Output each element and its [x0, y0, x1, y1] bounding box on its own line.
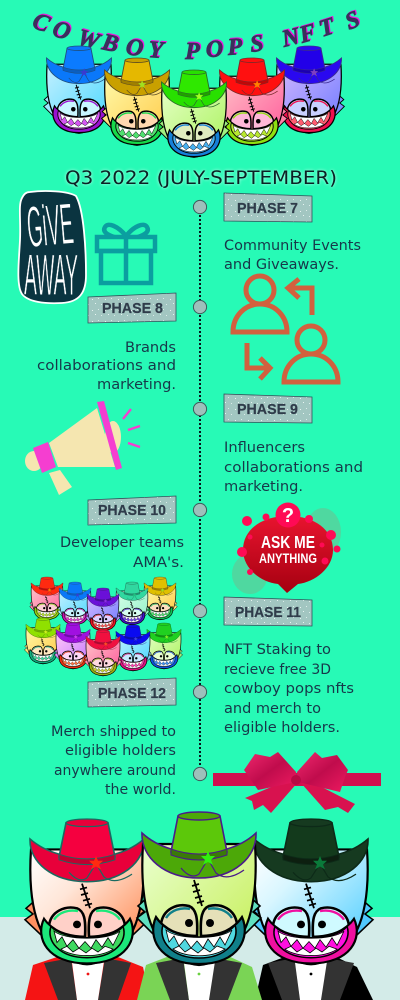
text: AWAY: [24, 243, 78, 308]
icon: ribbon bow: [213, 752, 381, 813]
subtitle: Q3 2022 (JULY-SEPTEMBER): [65, 167, 337, 189]
character: dark green hat large: [249, 819, 373, 964]
icon: ask me anything bubble: ?: [282, 505, 294, 527]
phase 7 label: [224, 193, 312, 222]
phase 7 text: and Giveaways.: [224, 257, 339, 273]
phase 11 label: PHASE 11: [235, 604, 301, 621]
phase 11 text: recieve free 3D: [224, 662, 331, 678]
character: green hat: [159, 70, 229, 157]
icon: ask me anything bubble: ASK ME: [261, 532, 315, 552]
phase 7 text: [224, 238, 361, 273]
character: red hat: [217, 58, 287, 145]
character: green hat large: [137, 812, 261, 965]
icon: ask me anything bubble: [232, 502, 341, 594]
phase 12 text: Merch shipped to: [51, 724, 176, 740]
icon: people exchange: [233, 276, 338, 382]
icon: ask me anything bubble: ANYTHING: [259, 551, 317, 566]
phase 8 label: [88, 293, 176, 323]
phase 8 text: [37, 340, 176, 393]
phase 9 text: marketing.: [224, 479, 303, 495]
jacket: right: [255, 955, 373, 1000]
timeline: [193, 200, 207, 781]
floor band: [0, 917, 400, 1000]
phase 9 label: PHASE 9: [237, 401, 298, 418]
header characters: five cowboy pops: [44, 46, 344, 157]
phase 10 text: [60, 535, 184, 571]
phase 12 text: the world.: [105, 782, 176, 798]
phase 8 text: Brands: [125, 340, 176, 356]
title: COWBOY POPS NFTS: [29, 6, 364, 65]
phase 9 text: [224, 440, 363, 495]
icon: megaphone: [25, 401, 140, 495]
character: blue hat: [44, 46, 114, 133]
character: yellow hat: [102, 58, 172, 145]
phase 8 text: collaborations and: [37, 358, 176, 374]
phase 10 label: PHASE 10: [98, 502, 166, 519]
icon: give away badge: [18, 191, 86, 308]
phase 11 text: [224, 642, 354, 736]
bottom characters: [25, 812, 373, 1000]
phase 10 text: Developer teams: [60, 535, 184, 551]
phase 10 label: [88, 496, 176, 525]
phase 12 label: PHASE 12: [98, 685, 166, 702]
phase 8 text: marketing.: [97, 377, 176, 393]
phase 10 text: AMA's.: [133, 555, 184, 571]
phase 7 text: Community Events: [224, 238, 361, 254]
phase 12 text: eligible holders: [65, 743, 176, 759]
phase 12 text: anywhere around: [54, 763, 176, 779]
character: red hat large: [25, 819, 149, 964]
icon: gift box: [97, 225, 155, 283]
phase 11 text: and merch to: [224, 701, 321, 717]
phase 11 text: NFT Staking to: [224, 642, 331, 658]
phase 11 text: eligible holders.: [224, 720, 340, 736]
phase 12 label: [88, 678, 176, 707]
character: indigo hat: [274, 46, 344, 133]
group of ten cowboy pops: [24, 577, 183, 676]
phase 9 label: [224, 394, 312, 423]
phase 8 label: PHASE 8: [102, 300, 163, 317]
phase 9 text: collaborations and: [224, 460, 363, 476]
phase 7 label: PHASE 7: [237, 200, 298, 217]
phase 11 text: cowboy pops nfts: [224, 681, 354, 697]
phase 12 text: [51, 724, 176, 798]
text: GiVE: [24, 191, 76, 260]
phase 9 text: Influencers: [224, 440, 305, 456]
jacket: center: [137, 955, 262, 1000]
jacket: left: [25, 955, 150, 1000]
phase 11 label: [224, 597, 312, 626]
